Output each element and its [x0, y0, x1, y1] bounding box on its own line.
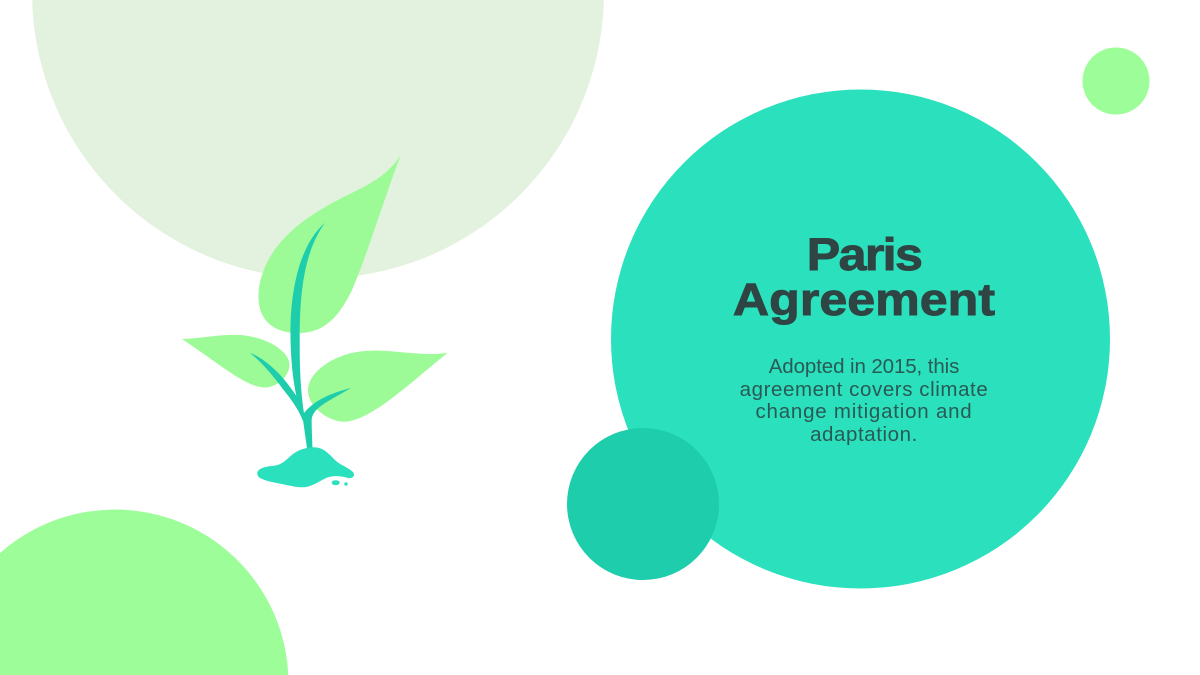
- pale green circle, top left: [32, 0, 604, 278]
- large teal circle: [611, 90, 1110, 588]
- description text: adaptation.: [810, 423, 918, 446]
- small light green circle, top right: [1082, 48, 1150, 114]
- left leaf: [182, 335, 290, 388]
- description text: change mitigation and: [756, 400, 972, 423]
- description text: agreement covers climate: [740, 378, 988, 401]
- soil mound: [257, 447, 354, 487]
- top leaf: [258, 155, 401, 333]
- soil crumbs: [332, 480, 348, 486]
- light green circle, bottom left: [0, 510, 288, 675]
- stem and veins: [250, 223, 351, 448]
- description text: [740, 355, 988, 446]
- title: Paris: [807, 229, 921, 280]
- icon: seedling: [182, 155, 448, 487]
- title: Agreement: [733, 274, 995, 325]
- title: [733, 229, 995, 325]
- dark teal circle: [567, 428, 719, 580]
- right leaf: [308, 351, 448, 422]
- description text: Adopted in 2015, this: [769, 355, 959, 378]
